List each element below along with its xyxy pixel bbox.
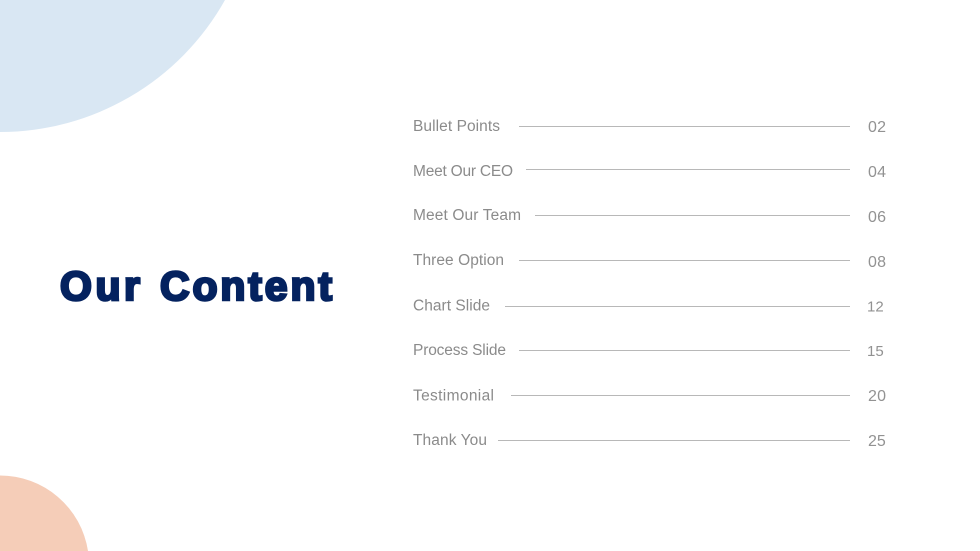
row: Bullet Points bbox=[413, 118, 886, 136]
title bbox=[60, 263, 332, 309]
contents list bbox=[413, 118, 886, 450]
row: Testimonial: Testimonial bbox=[413, 388, 494, 404]
row: Chart Slide: Chart Slide bbox=[413, 298, 490, 314]
row: Chart Slide bbox=[413, 298, 884, 316]
title: Content bbox=[160, 263, 332, 309]
row: Meet Our CEO bbox=[413, 163, 886, 181]
row: Meet Our Team: 06 bbox=[868, 209, 886, 226]
row: Three Option bbox=[413, 252, 886, 271]
row: Meet Our CEO: Meet Our CEO bbox=[413, 163, 513, 180]
row: Meet Our CEO: 04 bbox=[868, 164, 886, 181]
row: Process Slide: 15 bbox=[867, 343, 884, 360]
row: Process Slide: Process Slide bbox=[413, 342, 506, 359]
row: Thank You: Thank You bbox=[413, 432, 487, 449]
decorative peach circle bottom left bbox=[0, 476, 88, 551]
row: Bullet Points: Bullet Points bbox=[413, 118, 500, 135]
row: Process Slide bbox=[413, 342, 884, 360]
row: Meet Our Team bbox=[413, 207, 886, 226]
row: Thank You: 25 bbox=[868, 433, 886, 450]
row: Bullet Points: 02 bbox=[868, 119, 886, 136]
row: Thank You bbox=[413, 432, 886, 450]
row: Testimonial: 20 bbox=[868, 388, 886, 405]
row: Testimonial bbox=[413, 388, 886, 405]
title: Our bbox=[60, 263, 140, 309]
row: Meet Our Team: Meet Our Team bbox=[413, 207, 521, 224]
row: Three Option: 08 bbox=[868, 254, 886, 271]
row: Chart Slide: 12 bbox=[867, 298, 884, 316]
row: Three Option: Three Option bbox=[413, 252, 504, 269]
decorative blue circle top left bbox=[0, 0, 225, 132]
